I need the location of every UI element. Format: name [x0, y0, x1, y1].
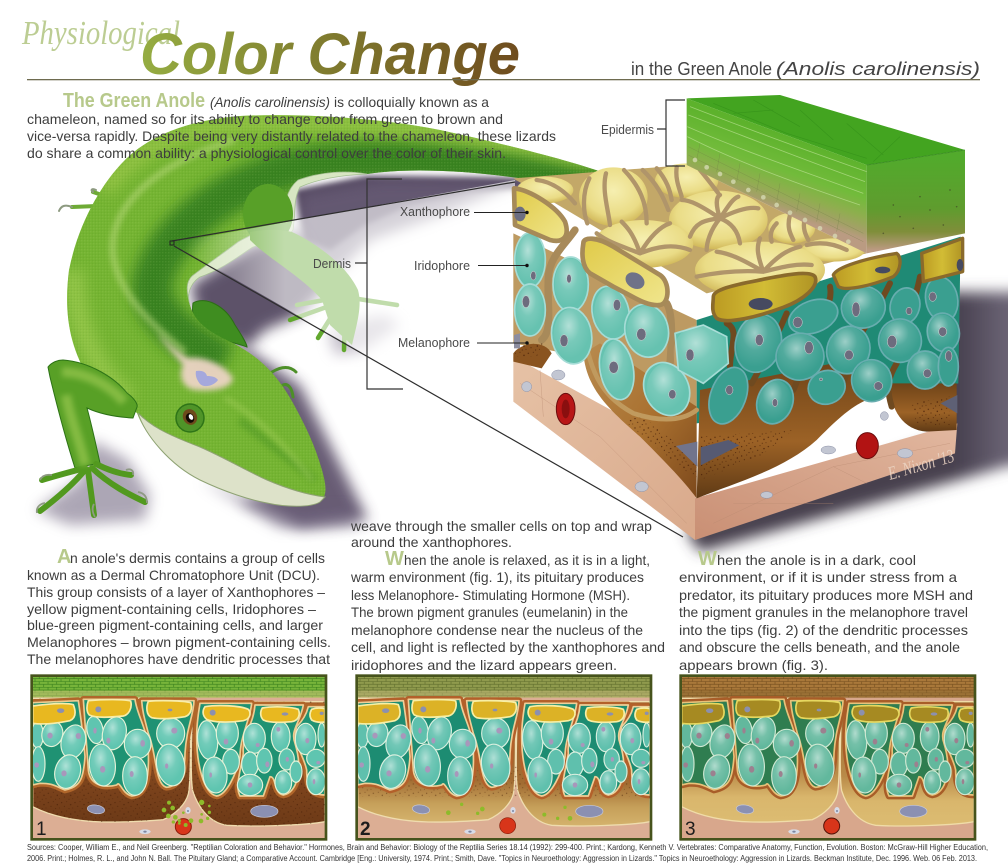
text column 1: yellow pigment-containing cells, Iridophores – — [27, 601, 316, 617]
text column 1: blue-green pigment-containing cells, and larger — [27, 617, 323, 633]
near front leg — [48, 360, 137, 468]
intro paragraph: vice-versa rapidly. Despite being very distantly related to the chameleon, these lizards — [27, 128, 556, 144]
panel: figure 3 pigment in tips, brown — [680, 676, 975, 840]
sources footnote — [27, 843, 988, 863]
text column 2: warm environment (fig. 1), its pituitary produces — [350, 569, 644, 585]
xanthophore cells — [514, 188, 963, 321]
epidermis layer — [687, 95, 965, 253]
jaw — [138, 413, 325, 506]
pink parietal patch — [157, 333, 233, 390]
text column 2: weave through the smaller cells on top and wrap — [350, 518, 652, 534]
panel: figure 2 pigment moving: 2 — [360, 819, 371, 840]
lizard body, tail and head — [67, 115, 602, 506]
intro paragraph: is colloquially known as a — [334, 94, 489, 110]
label: Xanthophore: Xanthophore — [400, 205, 470, 219]
text column 1: n anole's dermis contains a group of cells — [70, 550, 325, 566]
label: Dermis with bracket: Dermis — [313, 257, 351, 271]
text column 2: around the xanthophores. — [351, 534, 512, 550]
dermis pink faces — [513, 357, 697, 540]
shadows: cast shadow of lizard and skin block — [36, 176, 1008, 552]
dendritic process ribbons — [542, 230, 697, 419]
melanophore brown body — [513, 343, 957, 498]
text column 1: Melanophores – brown pigment-containing cells. — [27, 634, 331, 650]
far front leg — [192, 301, 247, 347]
text column 1: known as a Dermal Chromatophore Unit (DCU). — [27, 567, 320, 583]
intro paragraph — [27, 90, 556, 161]
text column 3 — [679, 548, 973, 673]
text column 3: predator, its pituitary produces more MSH and — [679, 587, 973, 603]
intro paragraph: (Anolis carolinensis) — [210, 94, 330, 110]
panel: figure 2 pigment moving — [356, 676, 651, 840]
artist signature: E. Nixon '13 — [885, 446, 957, 485]
dermal fibroblasts — [522, 370, 913, 498]
subtitle: in the Green Anole — [631, 59, 772, 79]
text column 2: melanophore condense near the nucleus of the — [351, 622, 643, 638]
upper cell bed left and right — [513, 233, 697, 423]
text column 2: The brown pigment granules (eumelanin) in the — [351, 604, 628, 620]
text column 3: environment, or if it is under stress from a — [679, 569, 957, 585]
front foot toes — [40, 464, 145, 515]
label: Dermis with bracket — [313, 179, 403, 389]
label: Melanophore — [398, 336, 529, 350]
text column 2: less Melanophore- Stimulating Hormone (MSH). — [351, 587, 630, 603]
text column 2: hen the anole is relaxed, as it is in a light, — [404, 552, 650, 568]
far hind foot — [59, 189, 102, 211]
yellow dome surface — [513, 163, 867, 298]
title: Color Change: Color Change — [140, 22, 520, 87]
text column 3: hen the anole is in a dark, cool — [717, 552, 916, 568]
pale belly strip — [187, 172, 367, 305]
intro paragraph: chameleon, named so for its ability to change color from green to brown and — [27, 111, 503, 127]
claws — [37, 469, 147, 517]
panel: figure 1 relaxed, melanin condensed — [31, 676, 326, 840]
text column 1: This group consists of a layer of Xanthophores – — [27, 584, 325, 600]
text column 3: appears brown (fig. 3). — [679, 657, 828, 673]
text column 3: and obscure the cells beneath, and the anole — [679, 639, 960, 655]
label: Xanthophore — [400, 205, 529, 219]
zoom wedge from lizard to skin block — [170, 180, 683, 537]
title: Physiological: Physiological — [21, 15, 180, 52]
label: Melanophore: Melanophore — [398, 336, 470, 350]
body shading — [60, 110, 600, 510]
subtitle — [631, 59, 980, 79]
text column 1: A — [57, 546, 71, 568]
intro paragraph: do share a common ability: a physiological control over the color of their skin. — [27, 145, 506, 161]
melanophore nuclei — [676, 442, 697, 467]
leg highlight — [62, 372, 124, 465]
near toes by head — [272, 368, 296, 397]
iridophore cells right face — [702, 274, 962, 429]
panel: figure 1 relaxed, melanin condensed: 1 — [36, 819, 47, 840]
label: Epidermis with bracket — [601, 100, 685, 166]
capillaries — [556, 393, 575, 425]
text column 3: into the tips (fig. 2) of the dendritic processes — [679, 622, 968, 638]
label: Iridophore: Iridophore — [414, 259, 470, 273]
skin block illustration — [513, 95, 965, 540]
text column 3: the pigment granules in the melanophore travel — [679, 604, 968, 620]
subtitle: (Anolis carolinensis) — [776, 59, 980, 79]
text column 2: iridophores and the lizard appears green. — [351, 657, 617, 673]
text column 1: The melanophores have dendritic processes that — [27, 651, 330, 667]
eye — [176, 404, 204, 432]
panel: figure 3 pigment in tips, brown: 3 — [685, 819, 696, 840]
iridophore cells left face — [515, 233, 728, 423]
text column 2 — [350, 518, 665, 673]
pineal blue mark — [196, 371, 218, 386]
lizard illustration — [37, 110, 602, 517]
title rule — [27, 79, 980, 80]
intro paragraph: The Green Anole — [63, 90, 205, 112]
text column 1 — [27, 546, 331, 667]
text column 3: W — [698, 548, 717, 570]
hind thigh, leg and foot — [243, 184, 397, 350]
text column 2: cell, and light is reflected by the xanthophores and — [351, 639, 665, 655]
label: Epidermis with bracket: Epidermis — [601, 123, 654, 137]
text column 2: W — [385, 548, 404, 570]
label: Iridophore — [414, 259, 529, 273]
